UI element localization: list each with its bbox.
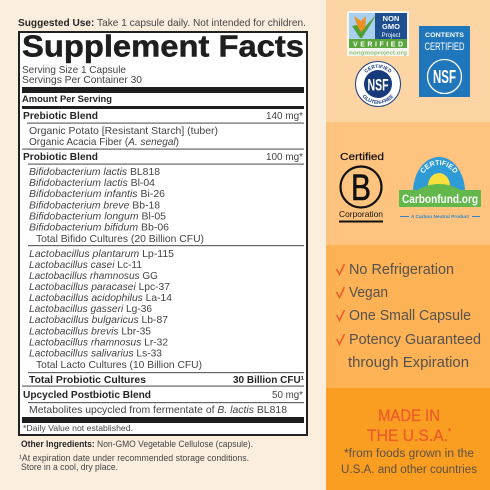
icon: non-gmo project badge: GMO xyxy=(382,22,400,31)
row: probiotic blend: Probiotic Blend xyxy=(23,151,98,163)
bifido cultures list: Bifidobacterium bifidum Bb-06 xyxy=(29,222,169,234)
lacto cultures list xyxy=(29,248,202,371)
heading: supplement facts: Supplement Facts xyxy=(22,28,304,64)
icon: non-gmo project badge: VERIFIED xyxy=(353,42,403,48)
prebiotic ingredients xyxy=(29,125,218,148)
row: probiotic blend xyxy=(23,151,303,163)
lacto cultures list: Lactobacillus plantarum Lp-115 xyxy=(29,248,174,260)
lacto cultures list: Lactobacillus salivarius Ls-33 xyxy=(29,348,162,360)
panel: supplement facts xyxy=(19,28,307,435)
icon: carbonfund.org badge: Carbonfund.org xyxy=(402,194,478,206)
daily value note: *Daily Value not established. xyxy=(23,423,133,433)
check item: no refrigeration: No Refrigeration xyxy=(349,262,454,278)
lacto cultures list: Total Lacto Cultures (10 Billion CFU) xyxy=(36,359,202,371)
bifido cultures list: Total Bifido Cultures (20 Billion CFU) xyxy=(36,233,204,245)
made in usa footnote: *from foods grown in the xyxy=(344,448,474,460)
icon: nsf contents certified badge: CERTIFIED xyxy=(424,41,465,53)
footnote xyxy=(19,453,249,472)
heading: made in the usa xyxy=(367,407,452,445)
lacto cultures list: Lactobacillus casei Lc-11 xyxy=(29,259,142,271)
bifido cultures list: Bifidobacterium lactis BL818 xyxy=(29,166,160,178)
lacto cultures list: Lactobacillus rhamnosus GG xyxy=(29,270,158,282)
prebiotic ingredients: Organic Potato [Resistant Starch] (tuber) xyxy=(29,125,218,137)
lacto cultures list: Lactobacillus brevis Lbr-35 xyxy=(29,326,151,338)
serving info: Serving Size 1 Capsule xyxy=(22,64,126,76)
bifido cultures list: Bifidobacterium infantis Bi-26 xyxy=(29,188,165,200)
row: probiotic blend: 100 mg* xyxy=(266,151,303,163)
check item: potency guaranteed xyxy=(336,332,481,371)
serving info xyxy=(22,64,142,86)
panel: certification badges bottom xyxy=(326,122,490,245)
panel: benefits checklist xyxy=(326,245,490,388)
row: prebiotic blend: Prebiotic Blend xyxy=(23,110,98,122)
heading: made in the usa: * xyxy=(448,427,452,436)
icon: nsf gluten-free badge: GLUTEN-FREE xyxy=(363,94,394,104)
icon: non-gmo project badge: Project xyxy=(382,33,401,39)
footnote: Store in a cool, dry place. xyxy=(21,462,118,472)
lacto cultures list: Lactobacillus gasseri Lg-36 xyxy=(29,303,152,315)
row: upcycled postbiotic blend: Upcycled Postbiotic Blend xyxy=(23,389,151,401)
lacto cultures list: Lactobacillus acidophilus La-14 xyxy=(29,292,172,304)
row: upcycled postbiotic blend: 50 mg* xyxy=(272,389,303,401)
icon: b corporation logo: Certified xyxy=(340,152,384,163)
bifido cultures list: Bifidobacterium lactis Bl-04 xyxy=(29,177,155,189)
check item: one small capsule: One Small Capsule xyxy=(349,308,471,324)
panel: certification badges top xyxy=(326,0,490,122)
check item: potency guaranteed: Potency Guaranteed xyxy=(349,332,481,348)
row: total probiotic cultures: Total Probiotic Cultures xyxy=(29,374,146,386)
lacto cultures list: Lactobacillus rhamnosus Lr-32 xyxy=(29,336,168,348)
icon: nsf contents certified badge xyxy=(419,26,470,97)
serving info: Servings Per Container 30 xyxy=(22,74,142,86)
suggested use text: Suggested Use: Take 1 capsule daily. Not intended for children. xyxy=(18,17,306,29)
row: prebiotic blend: 140 mg* xyxy=(266,110,303,122)
icon: carbonfund.org badge xyxy=(399,157,481,219)
icon: nsf contents certified badge: CONTENTS xyxy=(425,32,465,39)
lacto cultures list: Lactobacillus bulgaricus Lb-87 xyxy=(29,314,168,326)
row: prebiotic blend xyxy=(23,110,303,122)
icon: non-gmo project badge xyxy=(347,11,409,56)
panel: made in the usa xyxy=(326,388,490,490)
icon: carbonfund.org badge: A Carbon Neutral Product xyxy=(411,214,470,219)
bifido cultures list: Bifidobacterium breve Bb-18 xyxy=(29,200,160,212)
prebiotic ingredients: Organic Acacia Fiber (A. senegal) xyxy=(29,136,179,148)
bifido cultures list: Bifidobacterium longum Bl-05 xyxy=(29,210,166,222)
bifido cultures list xyxy=(29,166,204,245)
row: total probiotic cultures xyxy=(29,374,304,386)
made in usa footnote: U.S.A. and other countries xyxy=(341,464,477,476)
icon: nsf gluten-free badge: NSF xyxy=(368,76,388,94)
footnote: ¹At expiration date under recommended storage conditions. xyxy=(19,453,249,463)
row: upcycled postbiotic blend xyxy=(23,389,303,401)
other ingredients: Other Ingredients: Non-GMO Vegetable Cellulose (capsule). xyxy=(21,439,253,449)
row: total probiotic cultures: 30 Billion CFU¹ xyxy=(233,374,304,386)
icon: b corporation logo xyxy=(339,152,384,222)
icon: nsf contents certified badge: NSF xyxy=(433,67,456,87)
amount per serving: Amount Per Serving xyxy=(22,94,112,105)
made in usa footnote xyxy=(341,448,477,476)
check item: potency guaranteed: through Expiration xyxy=(348,355,469,371)
check item: vegan: Vegan xyxy=(349,285,388,301)
icon: b corporation logo: Corporation xyxy=(339,209,383,219)
metabolites text: Metabolites upcycled from fermentate of B. lactis BL818 xyxy=(29,404,287,416)
icon: carbonfund.org badge: CERTIFIED xyxy=(420,160,458,173)
heading: made in the usa: MADE IN xyxy=(378,407,440,425)
icon: nsf gluten-free badge xyxy=(355,61,401,107)
lacto cultures list: Lactobacillus paracasei Lpc-37 xyxy=(29,281,170,293)
icon: nsf gluten-free badge: CERTIFIED xyxy=(364,64,392,72)
heading: made in the usa: THE U.S.A. xyxy=(367,427,448,445)
icon: non-gmo project badge: NON xyxy=(383,14,399,23)
icon: b corporation logo: B xyxy=(351,167,371,208)
icon: non-gmo project badge: nongmoproject.org xyxy=(349,50,407,56)
